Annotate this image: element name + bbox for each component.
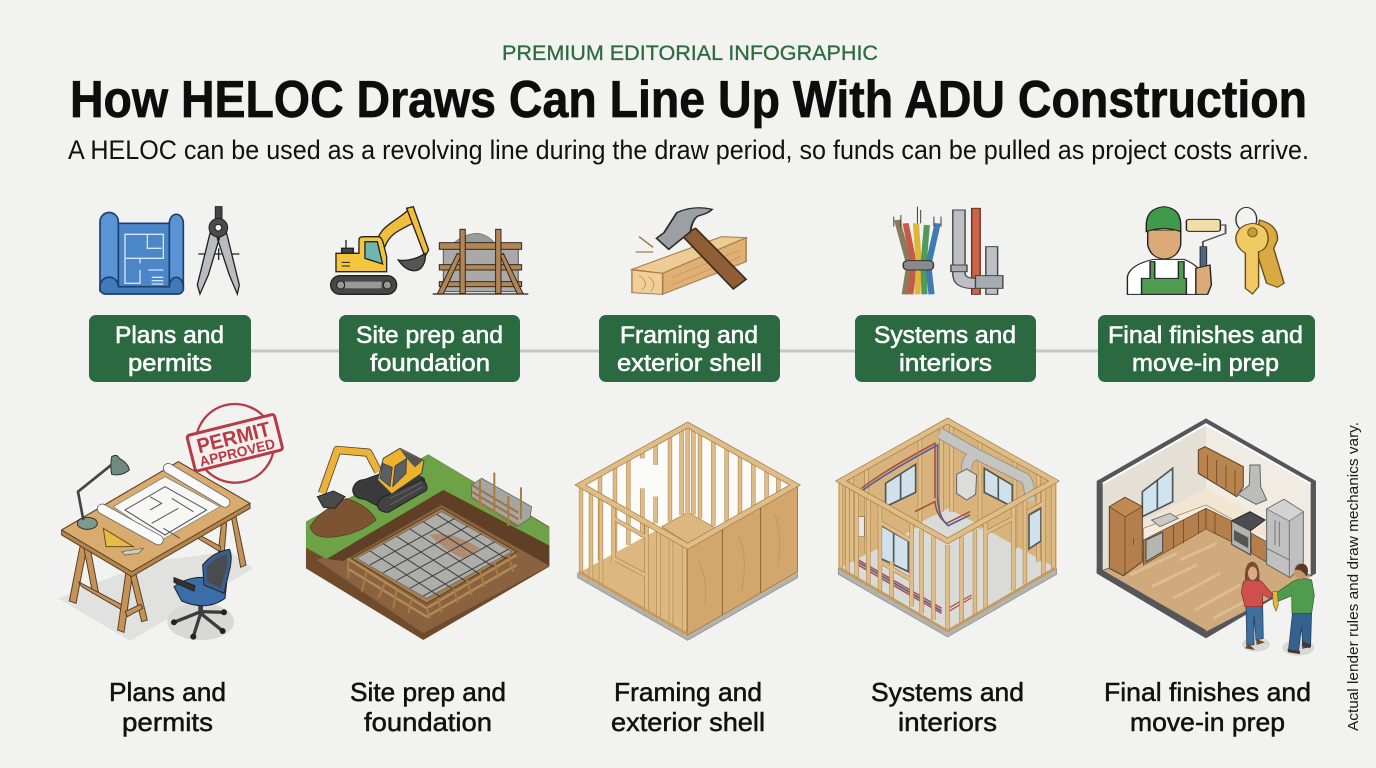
- disclaimer note: Actual lender rules and draw mechanics vary.: [1345, 422, 1362, 731]
- illustration: excavator, dirt pile and lumber stack: [310, 448, 532, 537]
- illustration: drafting desk with permit stamp: [58, 394, 288, 641]
- caption: final finishes and move-in prep: [1104, 677, 1311, 737]
- illustration: framed walls with exterior sheathing: [578, 423, 798, 640]
- step pill: systems and interiors: interiors: [899, 350, 992, 377]
- step pill: final finishes and move-in prep: Final finishes and: [1108, 322, 1303, 349]
- step pill: plans and permits: Plans and: [115, 322, 224, 349]
- icon: blueprint and compass: [100, 207, 239, 294]
- caption: site prep and foundation: Site prep and: [350, 677, 506, 707]
- caption: site prep and foundation: foundation: [364, 707, 492, 737]
- step pill: plans and permits: permits: [128, 350, 212, 377]
- caption: final finishes and move-in prep: Final finishes and: [1104, 677, 1311, 707]
- caption: site prep and foundation: [350, 677, 506, 737]
- step pill: final finishes and move-in prep: move-in prep: [1132, 350, 1279, 377]
- step pill: systems and interiors: Systems and: [874, 322, 1016, 349]
- caption: plans and permits: Plans and: [109, 677, 226, 707]
- step pill: site prep and foundation: foundation: [370, 350, 490, 377]
- step pill: plans and permits: [89, 315, 251, 382]
- caption: plans and permits: permits: [122, 707, 213, 737]
- caption: systems and interiors: Systems and: [871, 677, 1024, 707]
- step pill: framing and exterior shell: Framing and: [620, 322, 758, 349]
- caption: framing and exterior shell: Framing and: [614, 677, 762, 707]
- caption: framing and exterior shell: exterior shell: [611, 707, 765, 737]
- icon: wires and pipes: [894, 207, 1003, 294]
- timeline connector: [245, 350, 1105, 352]
- caption: systems and interiors: interiors: [898, 707, 997, 737]
- caption: plans and permits: [109, 677, 226, 737]
- step pill: site prep and foundation: [339, 315, 520, 382]
- caption: final finishes and move-in prep: move-in prep: [1130, 707, 1285, 737]
- illustration: drafting desk with permit stamp: PERMIT: [194, 418, 273, 458]
- step pill: site prep and foundation: Site prep and: [356, 322, 503, 349]
- step pill: framing and exterior shell: exterior shell: [617, 350, 762, 377]
- step pill: final finishes and move-in prep: [1098, 315, 1315, 382]
- step pill: systems and interiors: [855, 315, 1036, 382]
- kicker: PREMIUM EDITORIAL INFOGRAPHIC: [502, 42, 878, 65]
- step pill: framing and exterior shell: [599, 315, 780, 382]
- caption: systems and interiors: [871, 677, 1024, 737]
- illustration: framed walls with mechanical systems: [838, 419, 1057, 637]
- caption: framing and exterior shell: [611, 677, 765, 737]
- icon: hammer on lumber: [632, 208, 746, 294]
- illustration: drafting desk with permit stamp: APPROVED: [198, 435, 277, 469]
- icon: excavator and foundation form: [331, 207, 528, 294]
- illustration: finished kitchen with key handoff: [1097, 418, 1316, 656]
- illustration: excavated foundation with rebar: [306, 454, 549, 640]
- icon: worker with roller and keys: [1127, 207, 1284, 294]
- subtitle: A HELOC can be used as a revolving line during the draw period, so funds can be pulled as project costs arrive.: [68, 135, 1309, 165]
